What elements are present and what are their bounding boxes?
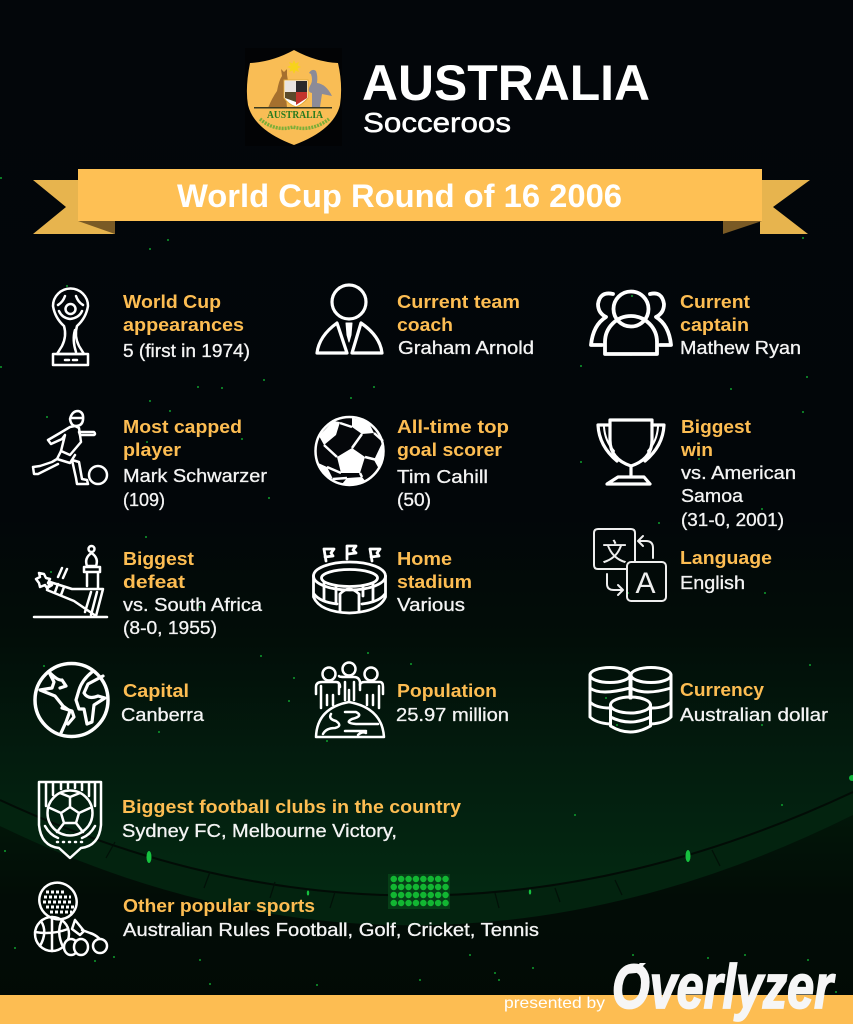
text: captain: captain — [680, 315, 749, 335]
text: World Cup appearances: appearances — [123, 315, 244, 335]
text: World Cup appearances: World Cup — [123, 292, 221, 312]
icon: coach — [317, 285, 382, 353]
icon: translate: A — [636, 567, 656, 600]
text: population — [396, 681, 509, 725]
panel: Current team coach — [317, 285, 534, 358]
text: capital: Canberra — [121, 705, 205, 725]
text: stadium — [397, 549, 472, 615]
text: goal scorer: (50) — [397, 490, 431, 510]
icon: crest — [39, 782, 101, 858]
icon: population — [316, 662, 384, 737]
text: biggest defeat: Biggest — [123, 549, 194, 569]
text: goal scorer: Tim Cahill — [397, 467, 488, 487]
text: World Cup appearances: 5 (first in 1974) — [123, 341, 250, 361]
text: biggest defeat: vs. South Africa — [123, 595, 263, 615]
text: goal scorer — [397, 417, 509, 510]
banner — [33, 169, 810, 234]
text: World Cup appearances — [123, 292, 250, 361]
text: biggest win: vs. American — [681, 463, 796, 483]
header logo: Australia crest: AUSTRALIA — [267, 110, 323, 121]
text: population: Population — [397, 681, 497, 701]
text: biggest win: Biggest — [681, 417, 751, 437]
panel: Current captain — [591, 292, 801, 358]
text: Most capped player — [123, 417, 267, 510]
panel: All-time top goal scorer — [316, 417, 509, 510]
text: biggest win: (31-0, 2001) — [681, 510, 784, 530]
icon: stadium — [314, 546, 386, 613]
text: stadium: Various — [397, 595, 465, 615]
icon: player — [33, 411, 107, 484]
panel: World Cup appearances — [53, 288, 250, 365]
text: coach — [397, 292, 534, 358]
panel: Biggest football clubs — [39, 782, 461, 858]
icon: World Cup trophy — [53, 288, 88, 365]
icon: translate — [594, 529, 666, 601]
text: capital: Capital — [123, 681, 189, 701]
icon: translate: 文 — [602, 539, 627, 567]
footer bar — [0, 995, 853, 1024]
panel: Home stadium — [314, 546, 472, 615]
text: currency — [680, 680, 828, 725]
panel: Population — [316, 662, 509, 737]
text: captain: Mathew Ryan — [680, 338, 801, 358]
subtitle: Socceroos: Socceroos — [363, 107, 511, 138]
panel: Most capped player — [33, 411, 267, 510]
presented by: presented by — [504, 995, 605, 1012]
text: biggest win: Samoa — [681, 486, 744, 506]
text: Most capped player: Most capped — [123, 417, 242, 437]
floodlight panel — [388, 874, 450, 909]
panel: Capital — [35, 664, 205, 736]
icon: captain — [591, 292, 671, 354]
text: capital — [121, 681, 205, 725]
panel: Biggest win — [598, 417, 796, 530]
title: Australia: AUSTRALIA — [362, 55, 650, 111]
text: clubs: Sydney FC, Melbourne Victory, — [122, 821, 397, 841]
text: language — [680, 548, 772, 593]
text: stadium: stadium — [397, 572, 472, 592]
text: captain: Current — [680, 292, 750, 312]
text: sports: Australian Rules Football, Golf, Cricket, Tennis — [123, 920, 539, 940]
text: biggest defeat: (8-0, 1955) — [123, 618, 217, 638]
panel: Currency — [590, 668, 828, 732]
text: population: 25.97 million — [396, 705, 509, 725]
text: captain — [680, 292, 801, 358]
icon: chess — [34, 546, 107, 617]
text: Most capped player: (109) — [123, 490, 165, 510]
panel: Biggest defeat — [34, 546, 263, 638]
text: language: Language — [680, 548, 772, 568]
text: coach: Graham Arnold — [398, 338, 534, 358]
text: stadium: Home — [397, 549, 452, 569]
icon: coins — [590, 668, 671, 732]
text: clubs — [122, 797, 461, 841]
text: goal scorer: All-time top — [397, 417, 509, 437]
text: sports: Other popular sports — [123, 896, 315, 916]
icon: globe — [35, 664, 108, 736]
banner title: World Cup Round of 16 2006 — [177, 178, 622, 214]
text: Most capped player: player — [123, 440, 181, 460]
text: goal scorer: goal scorer — [397, 440, 502, 460]
text: currency: Australian dollar — [680, 705, 828, 725]
panel: Language — [594, 529, 772, 601]
icon: sports — [32, 875, 107, 955]
text: Most capped player: Mark Schwarzer — [123, 466, 267, 486]
text: biggest win — [680, 417, 796, 530]
text: coach: Current team — [397, 292, 520, 312]
text: sports — [123, 896, 539, 940]
text: biggest defeat: defeat — [123, 572, 185, 592]
icon: football — [316, 417, 384, 485]
text: coach: coach — [397, 315, 453, 335]
panel: Other popular sports — [32, 875, 539, 955]
text: biggest defeat — [123, 549, 263, 638]
text: clubs: Biggest football clubs in the country — [122, 797, 461, 817]
header logo: Australia crest — [245, 48, 342, 146]
text: biggest win: win — [680, 440, 713, 460]
icon: cup — [598, 420, 664, 484]
text: language: English — [680, 573, 745, 593]
text: currency: Currency — [680, 680, 764, 700]
